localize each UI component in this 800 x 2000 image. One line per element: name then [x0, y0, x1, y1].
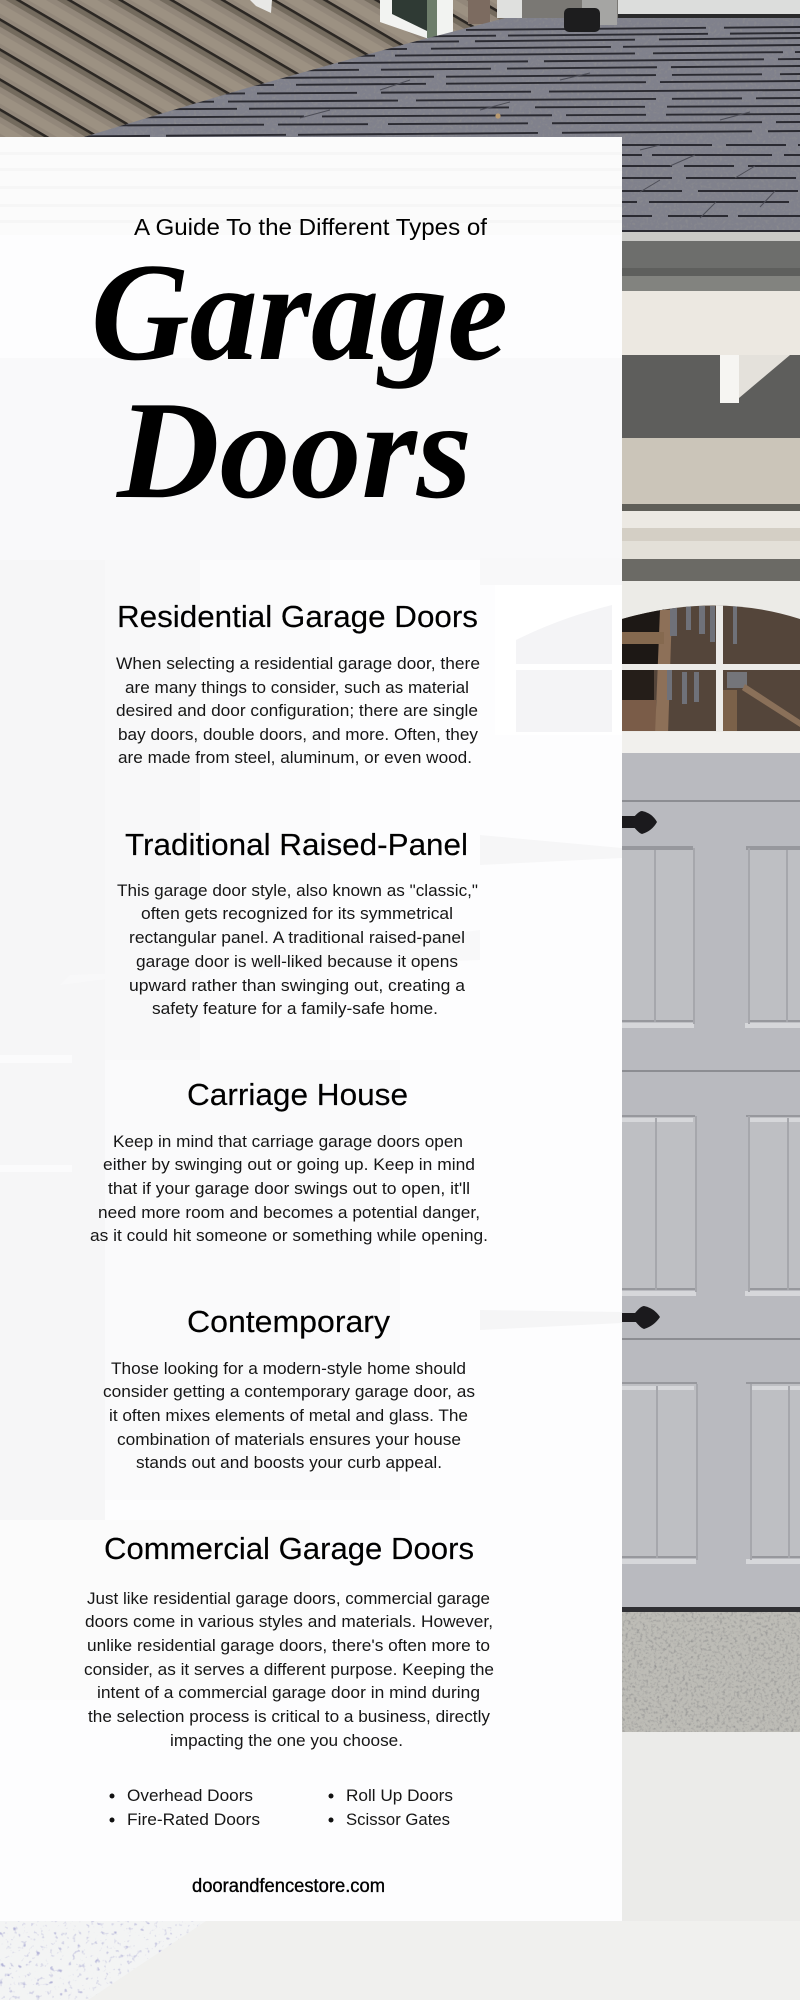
shingle roof — [84, 18, 800, 232]
window muntins — [622, 606, 800, 731]
text block: carriage house — [90, 1132, 488, 1245]
text block: commercial: impacting the one you choose. — [170, 1731, 403, 1750]
heading: traditional raised-panel: Traditional Raised-Panel — [125, 827, 468, 862]
text block: carriage house: need more room and becomes a potential danger, — [98, 1203, 480, 1222]
roof debris — [495, 113, 501, 119]
door bottom seal — [622, 1607, 800, 1612]
text block: contemporary: stands out and boosts your curb appeal. — [136, 1453, 442, 1472]
faint ghost image of the house — [0, 137, 622, 1700]
white bracket — [720, 355, 790, 403]
website footer: doorandfencestore.com — [192, 1876, 385, 1897]
text block: traditional raised-panel: safety feature for a family-safe home. — [152, 999, 438, 1018]
garage door — [622, 753, 800, 1610]
text block: commercial: the selection process is critical to a business, directly — [88, 1707, 490, 1726]
bullet list: left column — [110, 1786, 260, 1829]
downspout — [468, 0, 490, 24]
door seams — [622, 800, 800, 1340]
bullet list: right column: Scissor Gates — [346, 1810, 450, 1829]
silver dryer duct — [564, 0, 617, 32]
text block: residential: When selecting a residential garage door, there — [116, 654, 480, 673]
beige header board — [622, 438, 800, 504]
concrete driveway — [0, 1732, 800, 2000]
text block: commercial: unlike residential garage doors, there's often more to — [87, 1636, 490, 1655]
text block: traditional raised-panel: upward rather than swinging out, creating a — [129, 976, 466, 995]
text block: carriage house: either by swinging out or going up. Keep in mind — [103, 1155, 475, 1174]
window surround — [622, 581, 800, 752]
bullet list: right column: Roll Up Doors — [346, 1786, 453, 1805]
text block: carriage house: that if your garage door swings out to open, it'll — [108, 1179, 470, 1198]
upstairs window frame — [380, 0, 453, 40]
gravel strip — [622, 1612, 800, 1732]
bullet list: left column: Overhead Doors — [127, 1786, 253, 1805]
text block: residential: are many things to consider, such as material — [125, 678, 469, 697]
bullet list: left column: Fire-Rated Doors — [127, 1810, 260, 1829]
text block: commercial: intent of a commercial garage door in mind during — [97, 1683, 480, 1702]
text block: contemporary — [103, 1359, 475, 1472]
title — [91, 235, 508, 528]
text block: traditional raised-panel — [117, 881, 478, 1018]
text block: contemporary: Those looking for a modern-style home should — [111, 1359, 466, 1378]
text block: contemporary: combination of materials ensures your house — [117, 1430, 461, 1449]
heading: residential: Residential Garage Doors — [117, 599, 478, 634]
heading: carriage house: Carriage House — [187, 1077, 408, 1112]
text block: traditional raised-panel: garage door is well-liked because it opens — [136, 952, 458, 971]
text block: commercial: Just like residential garage doors, commercial garage — [87, 1589, 490, 1608]
text block: residential — [116, 654, 480, 767]
text block: residential: desired and door configuration; there are single — [116, 701, 478, 720]
text block: residential: bay doors, double doors, and more. Often, they — [118, 725, 478, 744]
arched door window — [622, 606, 800, 731]
heading: contemporary: Contemporary — [187, 1304, 391, 1339]
title: Doors — [115, 373, 472, 528]
subtitle: A Guide To the Different Types of — [134, 214, 488, 240]
text block: carriage house: Keep in mind that carriage garage doors open — [113, 1132, 463, 1151]
lower door frame — [622, 732, 800, 753]
text block: contemporary: it often mixes elements of metal and glass. The — [109, 1406, 468, 1425]
panel: translucent white content panel — [0, 137, 622, 1921]
text block: commercial — [84, 1589, 494, 1750]
text block: traditional raised-panel: This garage door style, also known as "classic," — [117, 881, 478, 900]
bullet list: right column — [328, 1786, 453, 1829]
door panels row 3 — [622, 1382, 800, 1564]
text block: contemporary: consider getting a contemporary garage door, as — [103, 1382, 475, 1401]
text block: carriage house: as it could hit someone or something while opening. — [90, 1226, 488, 1245]
white trim and soffit at top right — [497, 0, 800, 18]
text block: traditional raised-panel: rectangular panel. A traditional raised-panel — [129, 928, 465, 947]
heading: commercial: Commercial Garage Doors — [104, 1531, 474, 1566]
icon: lower door hinge — [622, 1306, 660, 1329]
text block: commercial: doors come in various styles and materials. However, — [85, 1612, 493, 1631]
text block: commercial: consider, as it serves a different purpose. Keeping the — [84, 1660, 494, 1679]
small white vent at top — [250, 0, 272, 13]
dark trim — [622, 504, 800, 511]
title: Garage — [91, 235, 508, 390]
text block: traditional raised-panel: often gets recognized for its symmetrical — [141, 904, 453, 923]
moulding — [622, 511, 800, 559]
dark band above door — [622, 559, 800, 581]
text block: residential: are made from steel, aluminum, or even wood. — [118, 748, 472, 767]
icon: upper door hinge — [622, 811, 657, 834]
gutter and fascia — [622, 232, 800, 291]
dark siding band — [622, 355, 800, 438]
siding: diagonal brown lap siding — [0, 0, 520, 137]
door panels row 1 — [622, 846, 800, 1028]
speckled gravel corner — [0, 1921, 220, 2000]
white beam — [622, 291, 800, 355]
door panels row 2 — [622, 1115, 800, 1296]
